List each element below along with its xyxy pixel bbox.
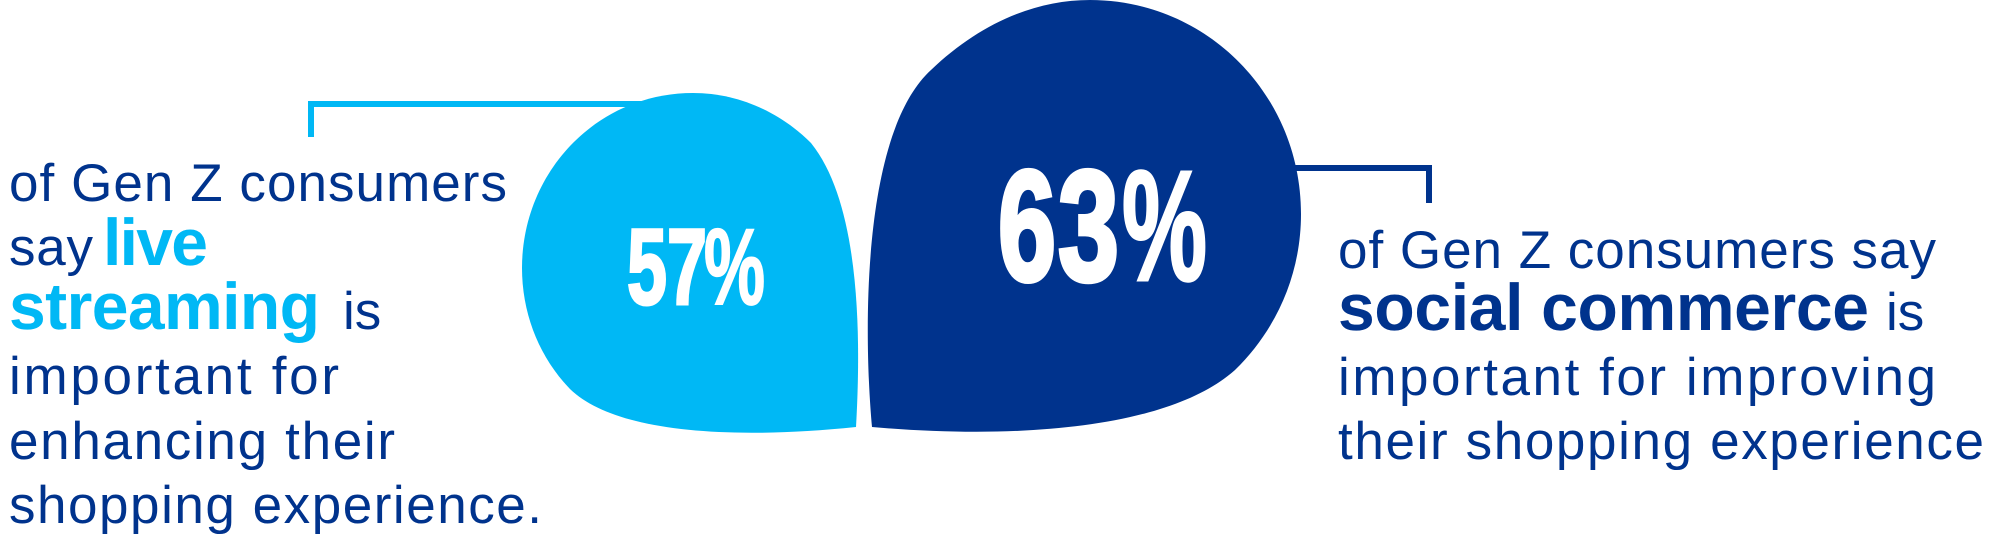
connector: light blue line (311, 104, 650, 137)
connector: dark blue line (1290, 168, 1429, 203)
text block: live streaming: of Gen Z consumers (9, 154, 507, 213)
text block: social commerce: social commerce (1338, 270, 1869, 344)
text block: live streaming: is (343, 282, 381, 341)
text block: live streaming: say (9, 218, 94, 277)
panel: 57% drop shape (522, 93, 858, 433)
text block: social commerce: of Gen Z consumers say (1338, 221, 1936, 280)
text block: live streaming: streaming (9, 269, 320, 343)
text block: social commerce: important for improving (1338, 348, 1936, 407)
text block: social commerce: their shopping experience (1338, 412, 1984, 471)
text block: live streaming: live (103, 205, 208, 279)
text block: social commerce (1338, 221, 1984, 471)
stat: 57%: % (704, 206, 765, 327)
stat: 57% (627, 206, 765, 327)
text block: live streaming: shopping experience. (9, 476, 542, 535)
stat: 63%: % (1122, 139, 1207, 314)
stat: 63%: 3 (1058, 139, 1119, 314)
stat: 63% (998, 139, 1207, 314)
text block: live streaming (9, 154, 542, 535)
stat: 63%: 6 (998, 139, 1056, 314)
text block: live streaming: important for (9, 347, 339, 406)
stat: 57%: 5 (627, 206, 667, 327)
text block: social commerce: is (1886, 283, 1924, 342)
stat: 57%: 7 (667, 206, 707, 327)
panel: 63% drop shape (868, 0, 1301, 432)
text block: live streaming: enhancing their (9, 412, 395, 471)
